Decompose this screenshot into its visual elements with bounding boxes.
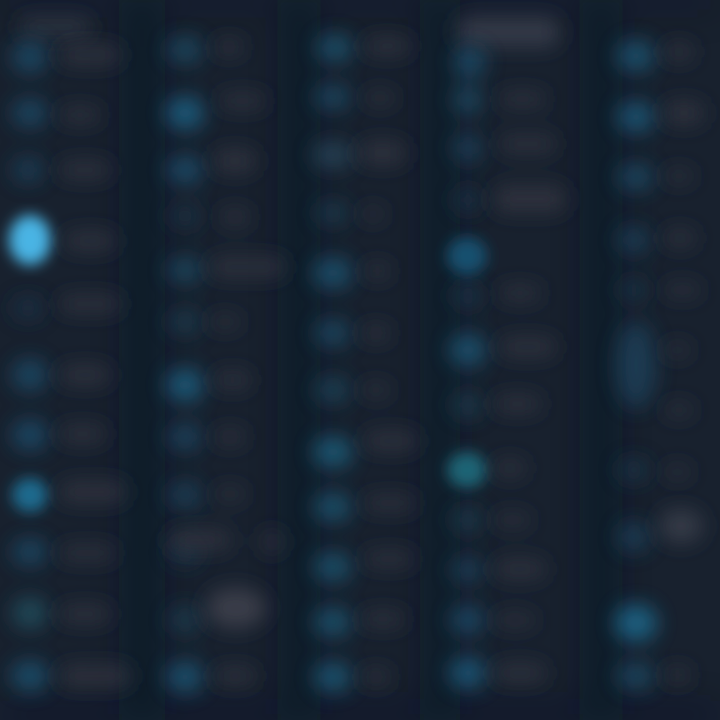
column 4 highlighted dot bbox=[447, 237, 487, 275]
panel: column 1 bbox=[9, 18, 130, 691]
column 2 text bars bbox=[170, 40, 285, 684]
secondary highlighted dot bbox=[12, 478, 48, 512]
column 5 text bars bbox=[665, 44, 703, 682]
panel: column 3 bbox=[312, 34, 417, 692]
panel: column 4 bbox=[447, 18, 565, 689]
column 3 text bars bbox=[360, 38, 417, 684]
bright highlighted dot bbox=[9, 215, 51, 265]
column 1 text bars bbox=[60, 46, 130, 686]
column 1 heading bbox=[20, 18, 90, 36]
column 1 dots bbox=[11, 41, 49, 691]
panel: column 5 bbox=[615, 40, 703, 690]
column 3 dots bbox=[312, 34, 354, 692]
column 4 teal highlighted dot bbox=[447, 452, 487, 488]
column 4 heading bbox=[458, 18, 558, 46]
column 5 dots bbox=[615, 40, 657, 690]
column 5 lighter bar bbox=[659, 509, 703, 543]
panel: column 2 bbox=[166, 36, 285, 693]
column 4 dots bbox=[449, 47, 487, 689]
column 2 dots bbox=[166, 36, 204, 693]
column 4 text bars bbox=[495, 92, 565, 682]
column 2 lighter bar bbox=[206, 588, 266, 628]
